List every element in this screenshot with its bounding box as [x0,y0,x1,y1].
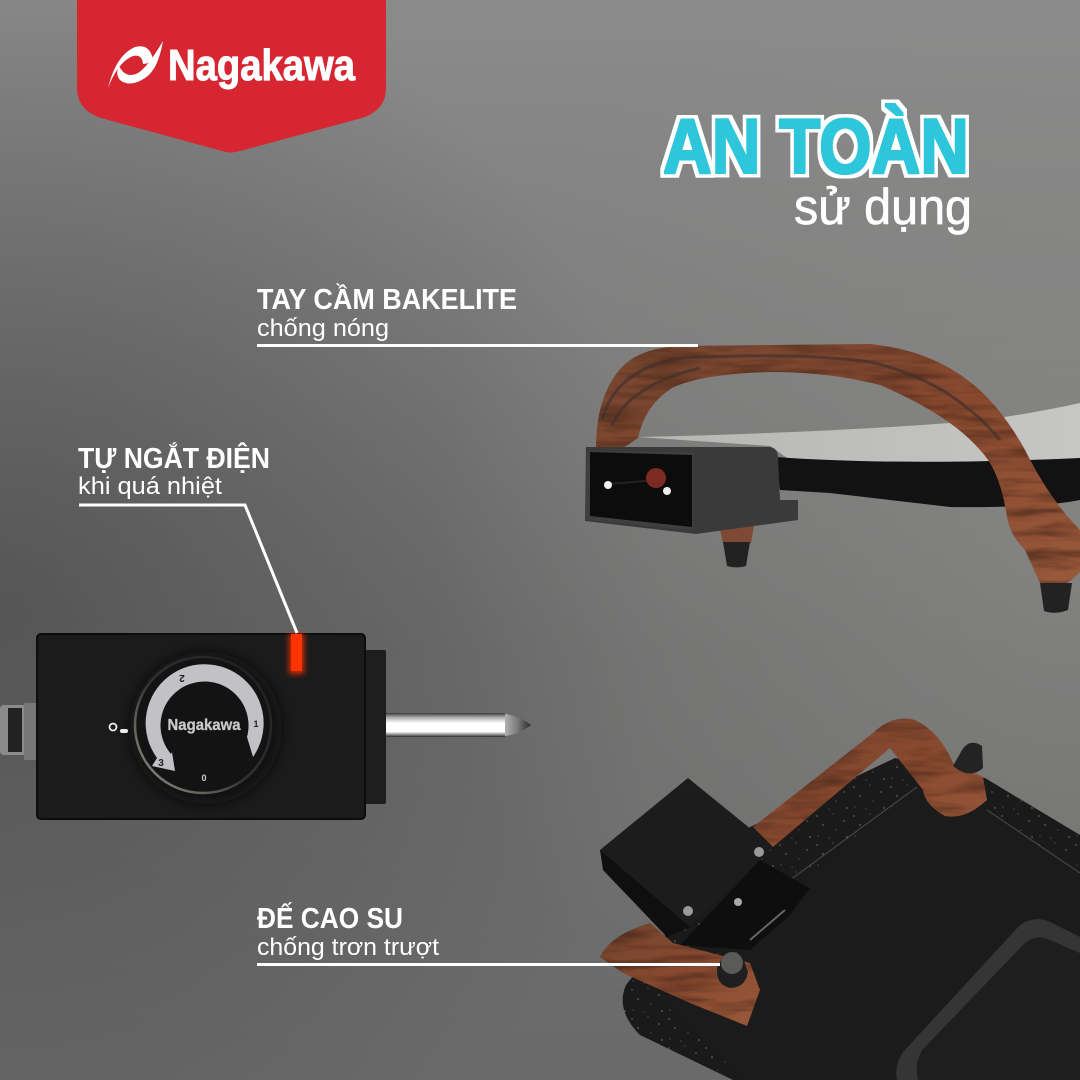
control box with thermostat [0,634,531,819]
callout: tay cầm bakelite: TAY CẦM BAKELITE [257,282,517,316]
logo wordmark: Nagakawa [168,41,355,90]
callout: tay cầm bakelite [257,282,698,347]
dial knob: 1 [253,719,259,729]
dial knob: 2 [179,672,185,683]
product photo: handle and plate side view [585,344,1080,613]
far rubber foot [719,525,754,568]
plate bottom [667,787,1080,1080]
black connector box [600,778,773,937]
logo mark [108,41,163,88]
callout: tự ngắt điện: khi quá nhiệt [78,473,222,500]
callout: tự ngắt điện [78,441,297,633]
subtitle: sử dụng: sử dụng [794,179,972,235]
callout: đế cao su: ĐẾ CAO SU [257,901,403,935]
plate centre recess [896,919,1080,1080]
rubber foot [953,743,983,774]
dial knob [135,657,271,793]
near rubber foot [1040,583,1072,613]
callout: đế cao su [257,901,720,966]
plate underside [775,457,1080,507]
bracket [680,860,810,950]
callout: tự ngắt điện: TỰ NGẮT ĐIỆN [78,441,270,475]
title: AN TOÀN: AN TOÀN [663,102,969,190]
rubber foot [717,952,748,988]
box body [37,634,365,819]
dial knob: Nagakawa [168,717,241,734]
plate top surface [638,403,1080,463]
wooden handle [596,344,1080,583]
dial arrow ring [146,664,264,771]
dial knob: 3 [158,758,164,769]
black plug socket [585,447,798,534]
near wooden handle [600,923,760,1026]
far wooden handle [753,719,987,847]
dial knob: 0 [201,773,207,783]
callout: đế cao su: chống trơn trượt [257,934,439,961]
rear plate [365,650,386,804]
callout: tay cầm bakelite: chống nóng [257,315,389,342]
connector left [0,703,37,760]
sparkle plate rim [623,758,1080,1080]
power indicator light [289,634,304,674]
product photo: plate underside [600,719,1080,1080]
logo banner [77,0,386,152]
small symbol [110,724,128,733]
probe pin [386,713,531,737]
